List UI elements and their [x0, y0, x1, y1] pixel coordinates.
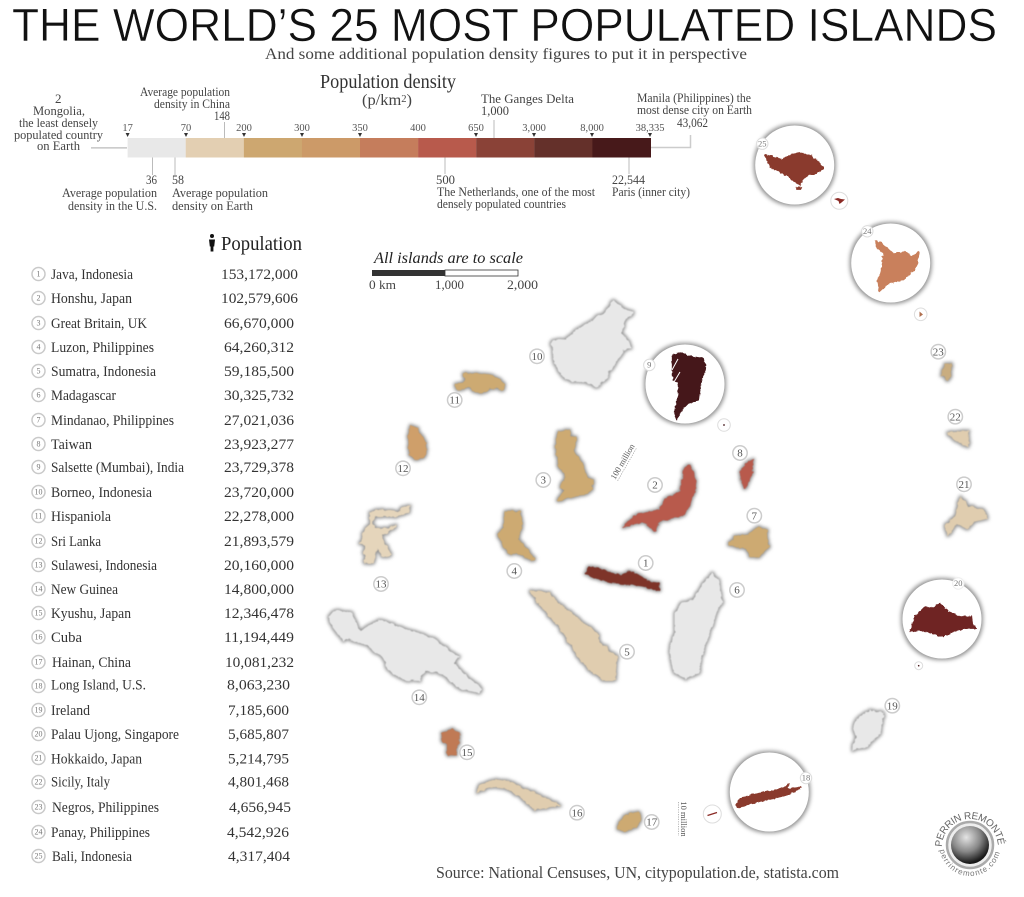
row 1: 153,172,000 — [221, 267, 298, 283]
callout: Manila: Manila (Philippines) the — [637, 90, 751, 105]
row 4 — [32, 340, 294, 356]
logo: PERRIN REMONTÉ — [935, 812, 1006, 846]
callout: Netherlands: densely populated countries — [437, 196, 566, 211]
row 2: Honshu, Japan — [51, 291, 132, 307]
callout lines — [152, 120, 629, 175]
density heading: (p/km — [362, 92, 399, 109]
callout: U.S.: density in the U.S. — [68, 198, 157, 213]
row 6: Madagascar — [51, 388, 116, 404]
row 10 — [32, 485, 294, 501]
row 21: Hokkaido, Japan — [51, 752, 142, 768]
row 2: 2 — [36, 294, 40, 303]
scale bar: 1,000 — [435, 277, 464, 292]
density heading: 2 — [401, 94, 407, 105]
island: Taiwan — [740, 460, 753, 488]
row 14: 14 — [34, 585, 42, 594]
number labels on map: 7 — [752, 510, 758, 522]
number labels on map: 21 — [958, 479, 970, 491]
island: Mindanao — [728, 527, 768, 557]
callout: U.S. — [62, 172, 157, 213]
annotation: 100 million: 100 million — [608, 441, 637, 481]
density tick labels: 70 — [181, 123, 191, 134]
row 12: 12 — [34, 537, 42, 546]
callout: Manila: most dense city on Earth — [637, 102, 752, 117]
row 3: Great Britain, UK — [51, 316, 147, 332]
island: Sulawesi — [360, 506, 410, 563]
callout: Mongolia: the least densely — [19, 115, 98, 130]
row 19 — [32, 703, 289, 719]
callout: Earth: 58 — [172, 172, 184, 187]
row 16: 11,194,449 — [224, 630, 294, 646]
row 5 — [32, 364, 294, 380]
callout: U.S.: 36 — [146, 172, 157, 187]
row 11 — [32, 509, 294, 525]
callout: U.S.: Average population — [62, 185, 157, 200]
row 12: 21,893,579 — [224, 534, 294, 550]
island: Negros — [942, 364, 952, 380]
row 7: Mindanao, Philippines — [51, 413, 174, 429]
row 25: Bali, Indonesia — [52, 849, 132, 865]
row 19: Ireland — [51, 703, 90, 719]
row 9: 9 — [36, 463, 40, 472]
number labels on map: 16 — [572, 807, 583, 819]
row 11: 22,278,000 — [224, 509, 294, 525]
row 4: 4 — [36, 343, 40, 352]
row 24: Panay, Philippines — [51, 825, 150, 841]
density tick labels: 300 — [294, 123, 310, 134]
row 11: 11 — [35, 512, 42, 521]
density tick labels: 200 — [236, 123, 252, 134]
panel: population table — [32, 233, 302, 865]
row 16: 16 — [34, 633, 42, 642]
magnifier: Salsette: 9 — [647, 360, 651, 370]
row 17: 17 — [34, 658, 42, 667]
row 16: Cuba — [51, 630, 82, 646]
island: Ireland — [852, 710, 883, 750]
row 22: 22 — [34, 778, 42, 787]
row 20: Palau Ujong, Singapore — [51, 727, 179, 743]
island: Sicily — [947, 431, 968, 447]
row 10: 23,720,000 — [224, 485, 294, 501]
number labels on map — [374, 344, 971, 829]
number labels on map: 15 — [462, 747, 473, 759]
row 7: 27,021,036 — [224, 413, 295, 429]
callout: China: Average population — [140, 84, 230, 99]
callout: China: density in China — [154, 96, 230, 111]
row 7 — [32, 413, 295, 429]
magnifier: Panay: 24 — [863, 226, 872, 236]
row 2: 102,579,606 — [221, 291, 299, 307]
annotation: 10 million: 10 million — [679, 801, 689, 837]
row 22 — [32, 774, 289, 790]
density heading: ) — [407, 92, 412, 109]
callout: Ganges Delta: 1,000 — [481, 103, 509, 118]
row 15: 12,346,478 — [224, 606, 294, 622]
callout: Netherlands: 500 — [436, 172, 455, 187]
row 24: 4,542,926 — [227, 825, 290, 841]
row 25: 25 — [34, 852, 42, 861]
row 17 — [32, 655, 294, 671]
row 15: Kyushu, Japan — [51, 606, 131, 622]
row 1 — [32, 267, 298, 283]
row 10: 10 — [34, 488, 42, 497]
density heading — [320, 71, 456, 109]
number labels on map: 13 — [376, 579, 387, 591]
row 25 — [32, 849, 291, 865]
row 8: 23,923,277 — [224, 437, 295, 453]
row 12: Sri Lanka — [51, 534, 101, 550]
number labels on map: 19 — [887, 700, 898, 712]
row 21: 5,214,795 — [228, 752, 289, 768]
number labels on map: 8 — [737, 448, 743, 460]
number labels on map: 23 — [933, 346, 944, 358]
row 23: 4,656,945 — [229, 800, 291, 816]
scale bar — [369, 250, 538, 292]
row 14: 14,800,000 — [224, 582, 294, 598]
row 1: Java, Indonesia — [51, 267, 133, 283]
density tick labels: 8,000 — [580, 123, 604, 134]
row 20: 5,685,807 — [228, 727, 290, 743]
callout: Ganges Delta — [481, 91, 574, 118]
island: Java — [586, 567, 659, 590]
row 21: 21 — [34, 754, 42, 763]
island: Cuba — [477, 780, 560, 809]
row 15 — [32, 606, 294, 622]
row 12 — [32, 534, 294, 550]
callout: Mongolia: populated country — [14, 127, 103, 142]
scale bar: 2,000 — [507, 277, 538, 292]
number labels on map: 3 — [541, 475, 547, 487]
map: islands — [328, 301, 987, 831]
island: Borneo — [552, 301, 633, 387]
row 15: 15 — [34, 609, 42, 618]
row 22: 4,801,468 — [228, 774, 289, 790]
number labels on map: 17 — [646, 817, 658, 829]
island: Hainan — [619, 813, 640, 831]
island: Sumatra — [531, 592, 617, 680]
row 16 — [32, 630, 294, 646]
island: Luzon — [498, 512, 535, 560]
row 7: 7 — [36, 416, 40, 425]
callout: Earth: Average population — [172, 185, 268, 200]
row 22: Sicily, Italy — [51, 774, 110, 790]
row 3: 3 — [36, 319, 40, 328]
row 24: 24 — [34, 828, 42, 837]
callout: Paris — [612, 172, 690, 199]
number labels on map: 1 — [643, 558, 648, 570]
row 5: 5 — [36, 367, 40, 376]
row 20 — [32, 727, 290, 743]
row 3 — [32, 316, 294, 332]
magnifier: Bali: 25 — [758, 138, 767, 148]
callout: Ganges Delta: The Ganges Delta — [481, 91, 574, 106]
callout: Netherlands: The Netherlands, one of the most — [437, 184, 595, 199]
row 14: New Guinea — [51, 582, 118, 598]
island: Great Britain — [556, 430, 593, 501]
magnifier: Panay — [851, 224, 930, 321]
row 6: 6 — [36, 391, 40, 400]
row 23: 23 — [34, 803, 42, 812]
row 13 — [32, 558, 294, 574]
row 10: Borneo, Indonesia — [51, 485, 152, 501]
row 14 — [32, 582, 294, 598]
row 5: 59,185,500 — [224, 364, 294, 380]
row 8 — [32, 437, 295, 453]
row 18: 8,063,230 — [227, 678, 290, 694]
number labels on map: 14 — [414, 692, 425, 704]
callout: Manila: 43,062 — [677, 115, 708, 130]
row 18: 18 — [34, 682, 42, 691]
row 1: 1 — [36, 270, 40, 279]
callout: China: 148 — [214, 108, 230, 123]
callout: Paris: 22,544 — [612, 172, 645, 187]
row 21 — [32, 752, 289, 768]
callout: China — [140, 84, 230, 123]
row 3: 66,670,000 — [224, 316, 294, 332]
callout: Netherlands — [436, 172, 595, 211]
row 23 — [32, 800, 291, 816]
density tick labels: 350 — [352, 123, 368, 134]
island: Hispaniola — [455, 373, 505, 393]
row 13: Sulawesi, Indonesia — [51, 558, 157, 574]
number labels on map: 5 — [624, 646, 630, 658]
number labels on map: 4 — [512, 566, 518, 578]
row 13: 13 — [34, 561, 42, 570]
magnifier: Long Island — [703, 752, 812, 832]
density tick labels: 38,335 — [636, 123, 664, 134]
density tick labels — [122, 123, 664, 137]
callout: Earth — [172, 172, 268, 213]
row 23: Negros, Philippines — [52, 800, 159, 816]
callout: Earth: density on Earth — [172, 198, 253, 213]
source: Source: National Censuses, UN, citypopulation.de, statista.com — [436, 863, 839, 882]
row 9: 23,729,378 — [224, 460, 294, 476]
logo — [935, 812, 1006, 876]
row 17: 10,081,232 — [225, 655, 294, 671]
density colour bar — [128, 138, 651, 158]
magnifier: Palau Ujong — [902, 578, 982, 670]
row 6 — [32, 388, 294, 404]
row 2 — [32, 291, 299, 307]
row 5: Sumatra, Indonesia — [51, 364, 156, 380]
number labels on map: 2 — [652, 480, 658, 492]
table heading: Population — [221, 233, 302, 255]
callout: Mongolia — [14, 91, 127, 153]
row 25: 4,317,404 — [228, 849, 291, 865]
island: Kyushu — [442, 729, 459, 756]
number labels on map: 22 — [950, 411, 961, 423]
row 6: 30,325,732 — [224, 388, 294, 404]
row 9: Salsette (Mumbai), India — [51, 460, 184, 476]
number labels on map: 12 — [398, 463, 408, 475]
row 8: 8 — [36, 440, 40, 449]
row 20: 20 — [34, 730, 42, 739]
density tick labels: 400 — [410, 123, 426, 134]
island: Hokkaido — [945, 497, 987, 535]
row 11: Hispaniola — [51, 509, 111, 525]
row 24 — [32, 825, 290, 841]
subtitle: And some additional population density figures to put it in perspective — [265, 46, 747, 63]
callout: Mongolia: Mongolia, — [33, 103, 85, 118]
row 9 — [32, 460, 294, 476]
row 13: 20,160,000 — [224, 558, 294, 574]
logo: perrinremonte.com — [938, 850, 1000, 876]
density heading: Population density — [320, 71, 456, 93]
number labels on map: 6 — [734, 585, 740, 597]
magnifier: Salsette — [644, 344, 730, 431]
magnifier: Bali — [755, 126, 848, 209]
island: Madagascar — [670, 574, 722, 678]
scale bar: 0 km — [369, 277, 396, 292]
island: New Guinea — [328, 611, 482, 693]
callout: Mongolia: on Earth — [37, 138, 80, 153]
callout: Manila — [637, 90, 752, 148]
row 19: 7,185,600 — [228, 703, 289, 719]
magnifier: Palau Ujong: 20 — [954, 578, 963, 588]
island: Honshu — [623, 465, 696, 531]
row 19: 19 — [34, 706, 42, 715]
row 8: Taiwan — [51, 437, 92, 453]
row 17: Hainan, China — [52, 655, 131, 671]
magnifier: Long Island: 18 — [802, 773, 810, 783]
density tick labels: 3,000 — [522, 123, 546, 134]
callout: Mongolia: 2 — [55, 91, 62, 106]
number labels on map: 10 — [532, 351, 543, 363]
island: Sri Lanka — [408, 427, 427, 459]
density tick labels: 650 — [468, 123, 484, 134]
row 4: Luzon, Philippines — [51, 340, 154, 356]
scale bar: All islands are to scale — [373, 250, 523, 267]
row 18: Long Island, U.S. — [51, 678, 146, 694]
density tick labels: 17 — [122, 123, 133, 134]
row 18 — [32, 678, 290, 694]
callout: Paris: Paris (inner city) — [612, 184, 690, 199]
number labels on map: 11 — [449, 395, 460, 407]
row 4: 64,260,312 — [224, 340, 294, 356]
panel: population density scale — [14, 71, 752, 213]
